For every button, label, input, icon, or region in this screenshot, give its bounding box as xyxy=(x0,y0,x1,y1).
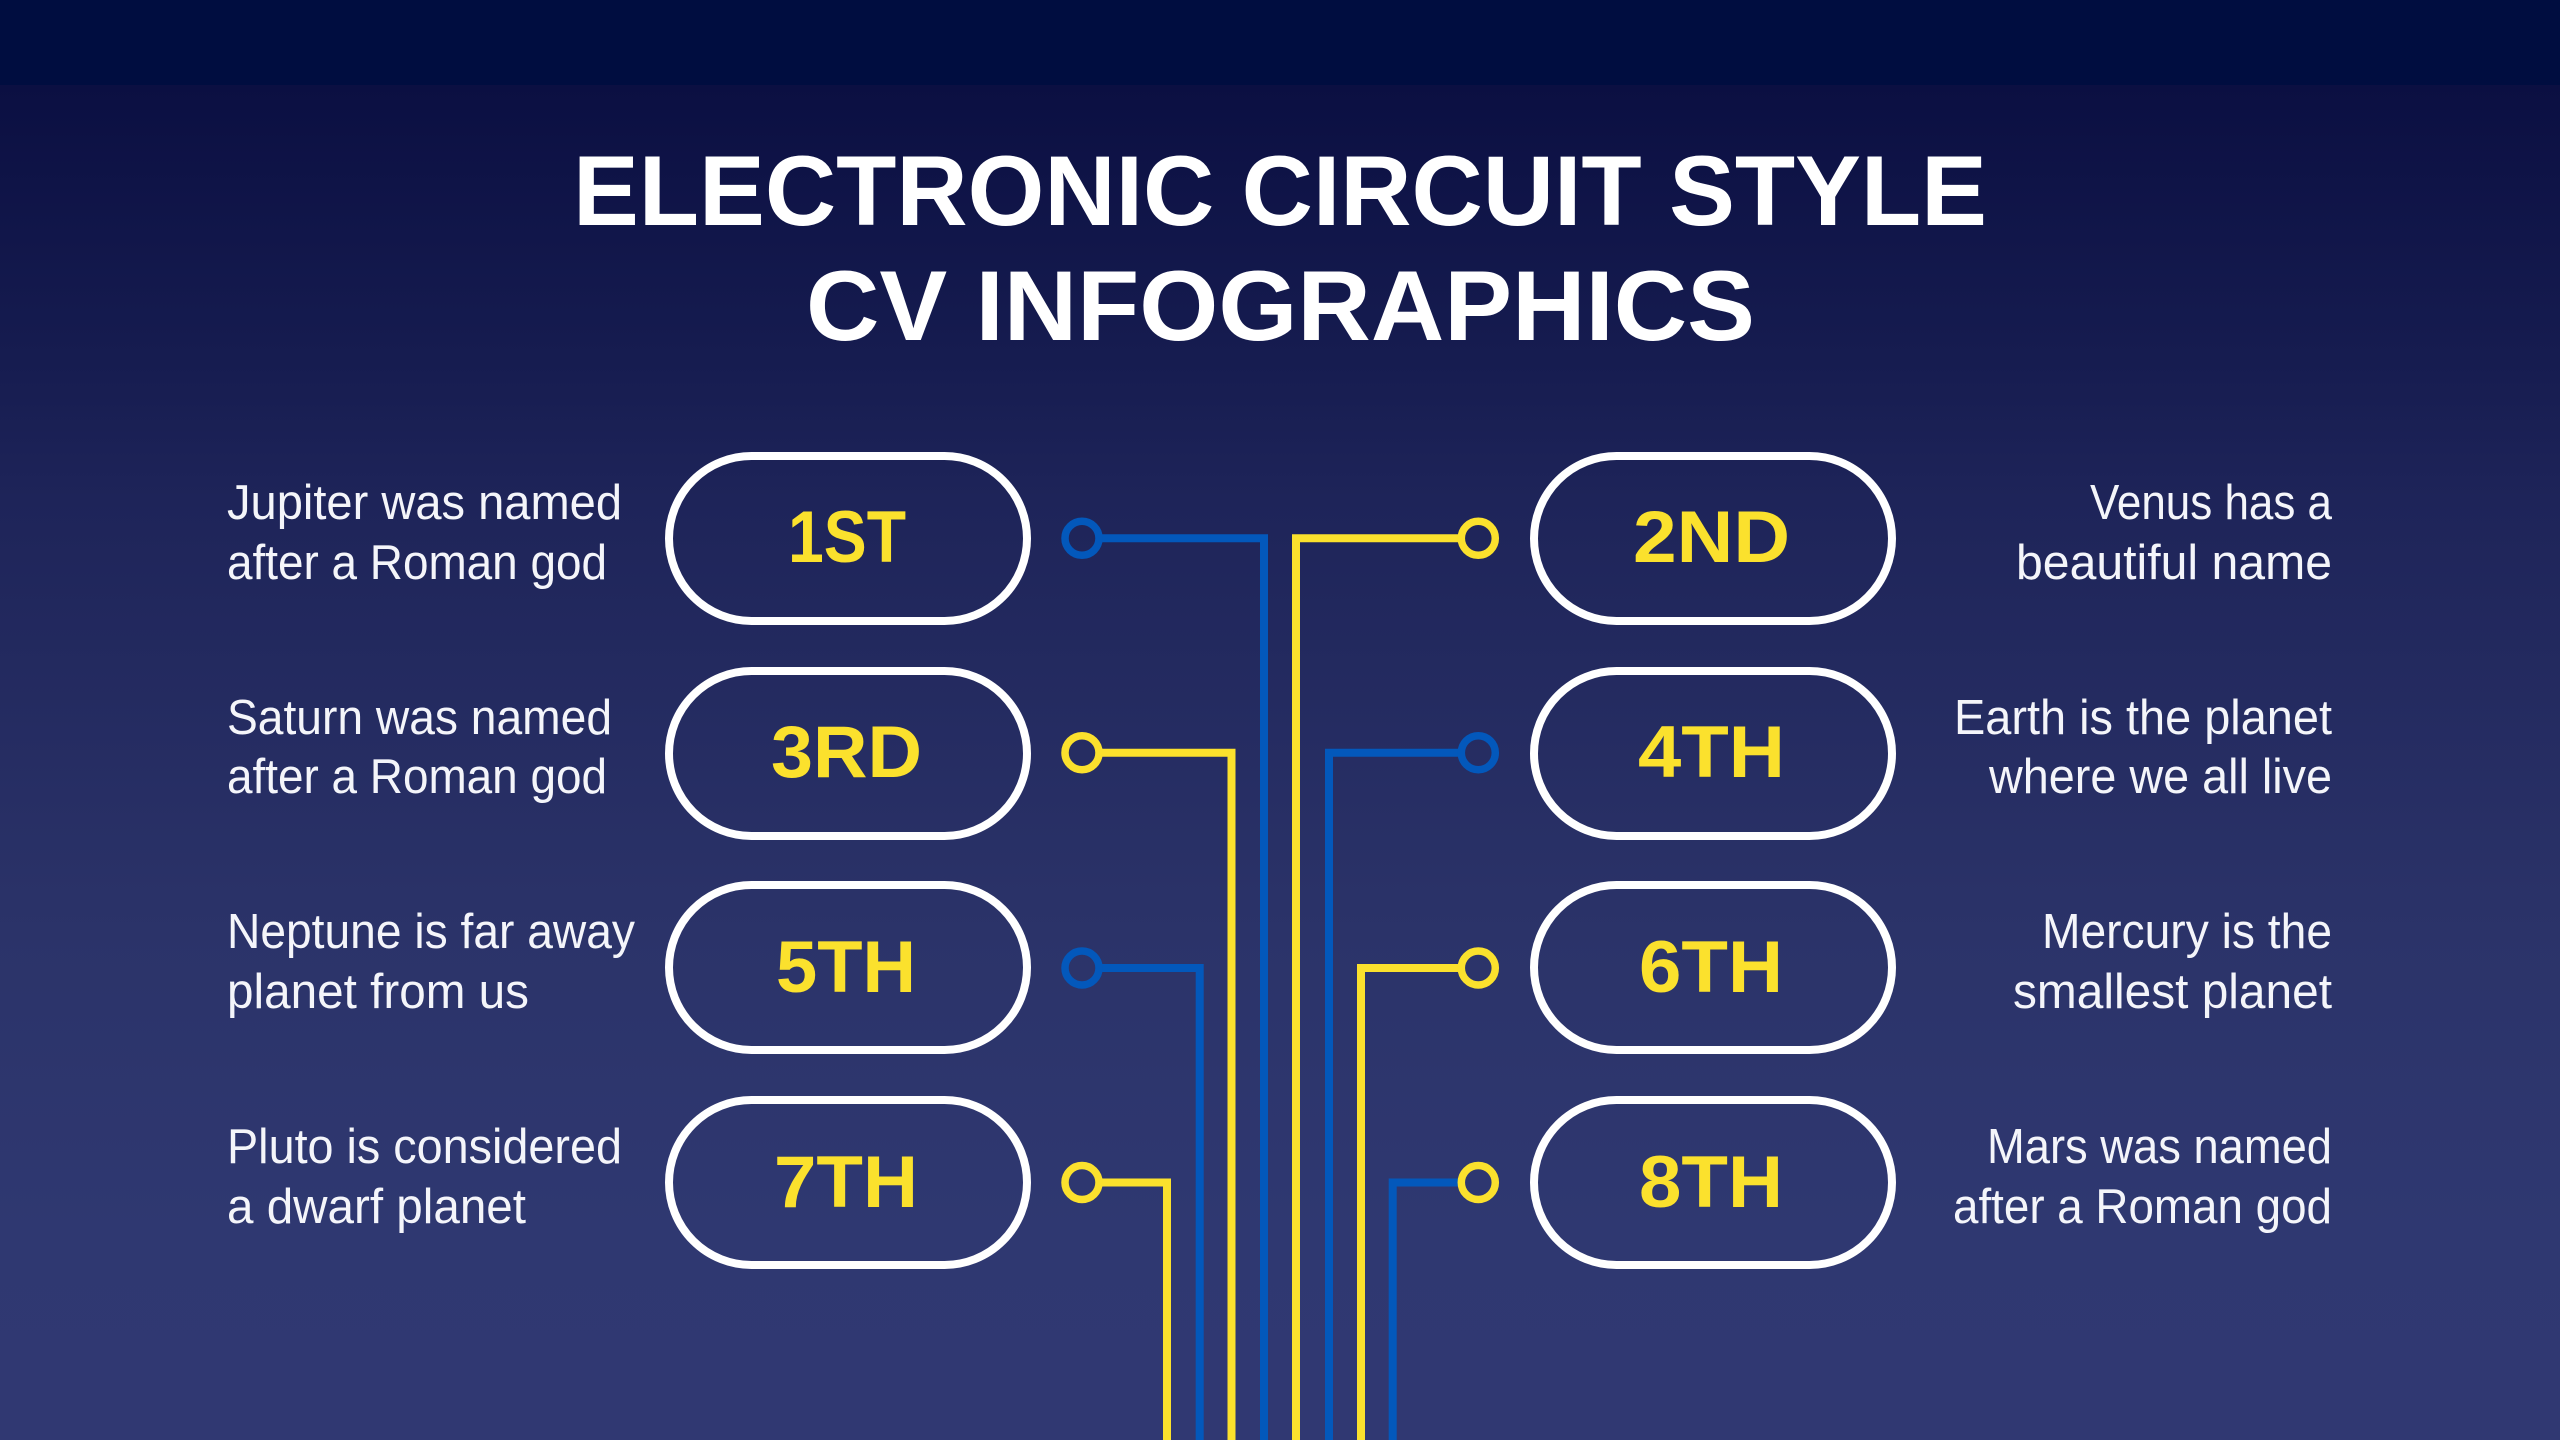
item: 8th: after a Roman god xyxy=(1953,1180,2332,1234)
connector: 7th xyxy=(1065,1166,1167,1440)
item: 7th: 7TH xyxy=(774,1142,918,1223)
item: 3rd xyxy=(227,671,1027,836)
item: 2nd: 2ND xyxy=(1633,497,1790,578)
item: 8th: Mars was named xyxy=(1987,1120,2332,1174)
circuit connectors xyxy=(1065,521,1495,1440)
title xyxy=(573,135,1987,361)
item: 6th: smallest planet xyxy=(2013,965,2332,1019)
item: 4th: 4TH xyxy=(1638,712,1785,793)
item: 2nd: beautiful name xyxy=(2016,536,2332,590)
connector: 3rd xyxy=(1065,736,1232,1440)
item: 6th: Mercury is the xyxy=(2042,905,2332,959)
connector: 2nd xyxy=(1296,521,1495,1440)
item: 4th xyxy=(1534,671,2332,836)
item: 7th: Pluto is considered xyxy=(227,1120,622,1174)
item: 5th: Neptune is far away xyxy=(227,905,635,959)
item: 2nd xyxy=(1534,456,2333,621)
title: ELECTRONIC CIRCUIT STYLE xyxy=(573,135,1987,246)
connector: 6th xyxy=(1361,951,1495,1440)
item: 4th: where we all live xyxy=(1988,750,2332,804)
item: 1st: after a Roman god xyxy=(227,536,607,590)
item: 6th xyxy=(1534,885,2332,1050)
item: 8th: 8TH xyxy=(1639,1142,1783,1223)
item: 5th xyxy=(227,885,1027,1050)
item: 3rd: after a Roman god xyxy=(227,750,607,804)
item: 1st xyxy=(227,456,1027,621)
connector: 8th xyxy=(1393,1166,1495,1440)
connector: 5th xyxy=(1065,951,1200,1440)
item: 7th xyxy=(227,1100,1027,1265)
item: 2nd: Venus has a xyxy=(2090,476,2333,530)
item: 3rd: 3RD xyxy=(771,712,922,793)
connector: 4th xyxy=(1329,736,1495,1440)
item: 3rd: Saturn was named xyxy=(227,691,612,745)
item: 7th: a dwarf planet xyxy=(227,1180,526,1234)
item: 6th: 6TH xyxy=(1639,927,1783,1008)
item: 1st: Jupiter was named xyxy=(227,476,622,530)
item: 5th: 5TH xyxy=(776,927,916,1008)
item: 5th: planet from us xyxy=(227,965,529,1019)
item: 4th: Earth is the planet xyxy=(1954,691,2332,745)
item: 8th xyxy=(1534,1100,2332,1265)
title: CV INFOGRAPHICS xyxy=(806,250,1755,361)
item: 1st: 1ST xyxy=(788,497,906,578)
connector: 1st xyxy=(1065,521,1264,1440)
